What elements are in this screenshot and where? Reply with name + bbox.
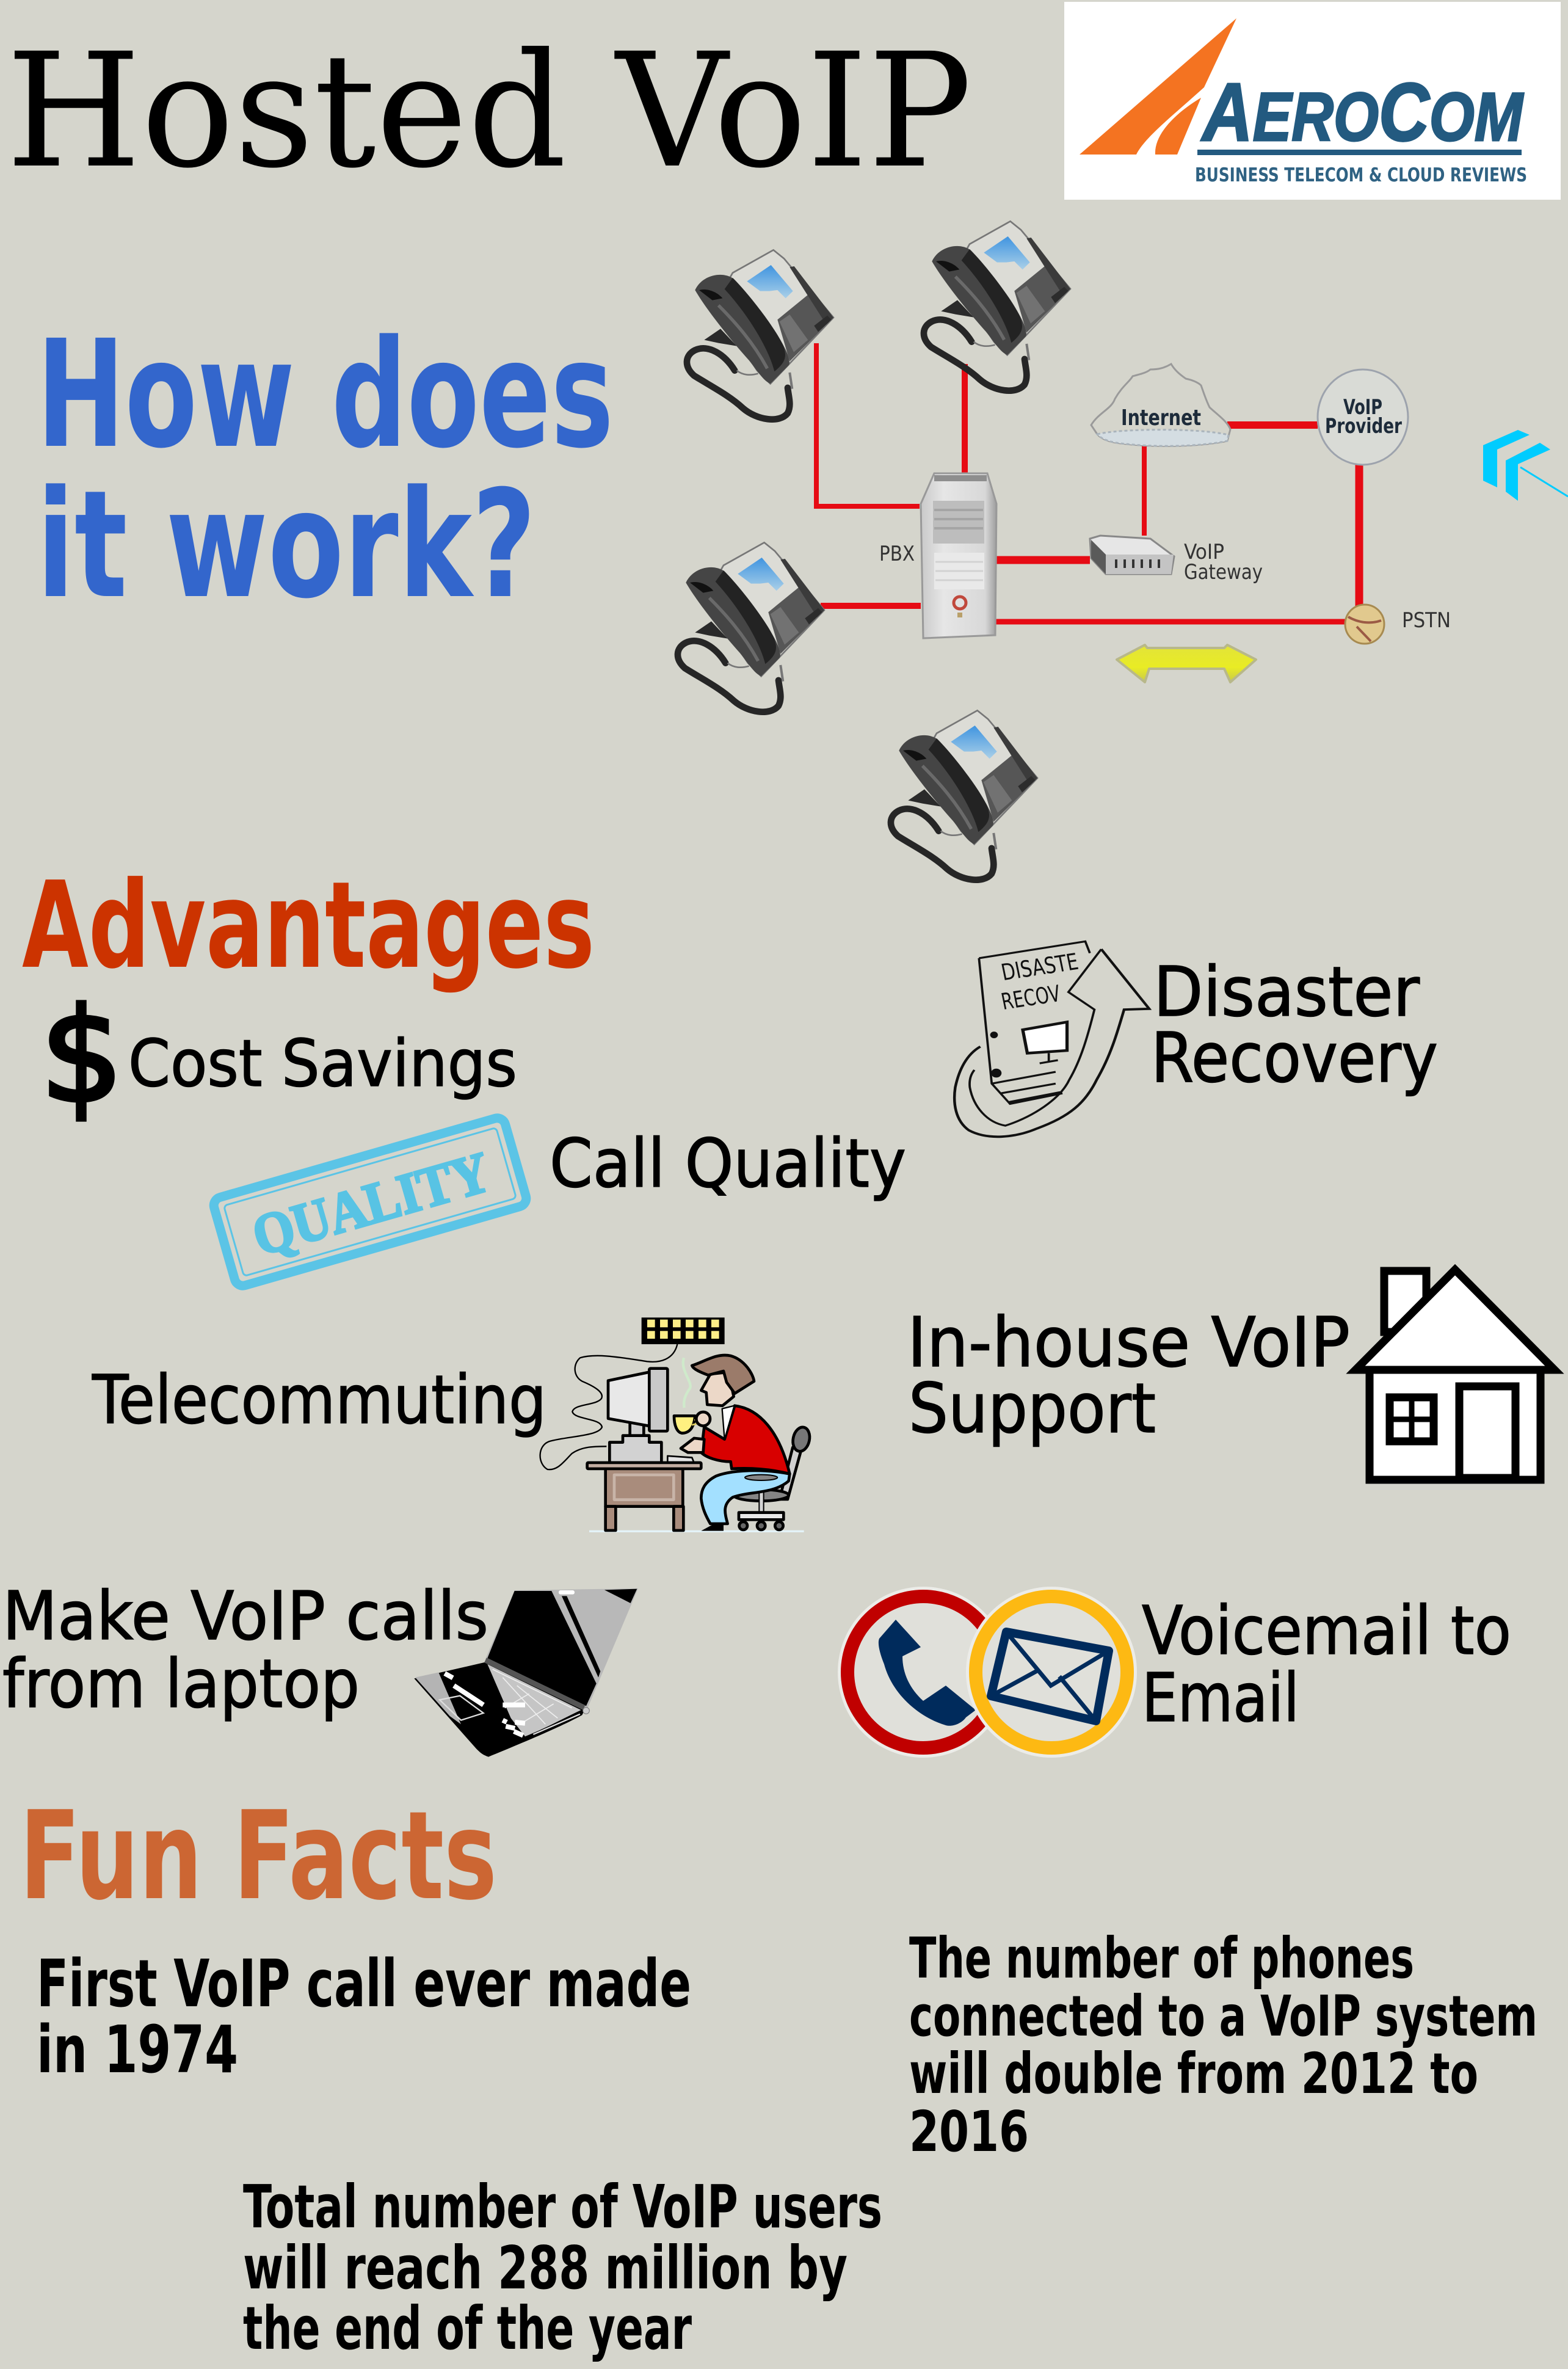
text: disaster recovery: Recovery [1151,1019,1438,1098]
logo tagline: BUSINESS TELECOM & CLOUD REVIEWS [1195,164,1527,186]
icon: disaster recovery document and arrow: DISASTE [999,948,1081,986]
text: make VoIP calls from laptop: Make VoIP calls [2,1577,488,1655]
icon: house [1356,1270,1555,1480]
icon: red phone badge [838,1587,1009,1758]
title: Hosted VoIP [6,20,972,203]
icon: laptop [414,1588,638,1757]
heading: fun facts: Fun Facts [20,1785,497,1927]
icon: PBX tower [921,473,996,638]
icon: quality stamp [212,1116,528,1287]
text: in-house VoIP support: In-house VoIP [907,1303,1350,1383]
chart: VoIP network diagram [678,221,1451,880]
icon: person at computer [540,1317,811,1531]
icon: quality stamp: QUALITY [245,1140,497,1268]
icon: yellow envelope badge [966,1587,1137,1758]
text: first VoIP call: in 1974 [37,2012,238,2088]
text: total users: the end of the year [243,2294,692,2363]
text: cost savings: Cost Savings [128,1026,517,1101]
text: telecommuting: Telecommuting [92,1361,546,1439]
text: make VoIP calls from laptop: from laptop [2,1645,360,1723]
text: number of phones: 2016 [909,2099,1029,2164]
text: call quality: Call Quality [550,1124,906,1203]
icon: internet cloud [1091,364,1230,446]
icon: VoIP gateway [1090,536,1174,574]
text: voicemail to email: Voicemail to [1142,1592,1511,1670]
icon: dollar sign: $ [40,980,123,1131]
icon: PSTN globe [1345,605,1384,644]
heading: how does it work: How does [37,308,614,481]
text: first VoIP call: First VoIP call ever made [37,1946,691,2022]
icon: phone 4 [891,710,1037,880]
icon: phone 3 [678,542,824,712]
label: VoIP Provider: Provider [1325,414,1403,439]
panel: fun facts [20,1785,1537,2363]
label: PBX: PBX [879,542,915,566]
icon: orange swoosh [1080,18,1236,155]
heading: how does it work: it work? [37,459,536,631]
icon: phone 2 [924,221,1070,391]
text: voicemail to email: Email [1142,1659,1299,1737]
label: Internet: Internet [1121,406,1201,431]
label: VoIP Provider: VoIP [1343,395,1382,420]
arrow: yellow double arrow [1117,645,1256,682]
icon: disaster recovery document and arrow: RECOV [999,980,1063,1015]
icon: phone 1 [687,250,833,420]
text: total users: will reach 288 million by [243,2233,848,2302]
logo rule [1197,150,1522,155]
text: in-house VoIP support: Support [909,1369,1156,1449]
label: VoIP Gateway: VoIP [1184,540,1224,564]
icon: disaster recovery document and arrow [954,941,1149,1137]
logo wordmark: AEROCOM [1200,66,1524,158]
text: disaster recovery: Disaster [1153,953,1420,1032]
panel: advantages [2,856,1555,1758]
icon: phone and envelope badges [838,1587,1137,1758]
text: number of phones: The number of phones [909,1926,1414,1991]
label: VoIP Gateway: Gateway [1184,560,1263,584]
arrow: cyan chevron cursor [1483,430,1568,501]
logo: AeroCom [1064,2,1561,200]
text: total users: Total number of VoIP users [243,2172,882,2241]
icon: VoIP provider circle [1318,369,1408,465]
label: PSTN: PSTN [1402,608,1451,633]
heading: advantages: Advantages [22,856,595,995]
connection lines [816,343,1359,622]
